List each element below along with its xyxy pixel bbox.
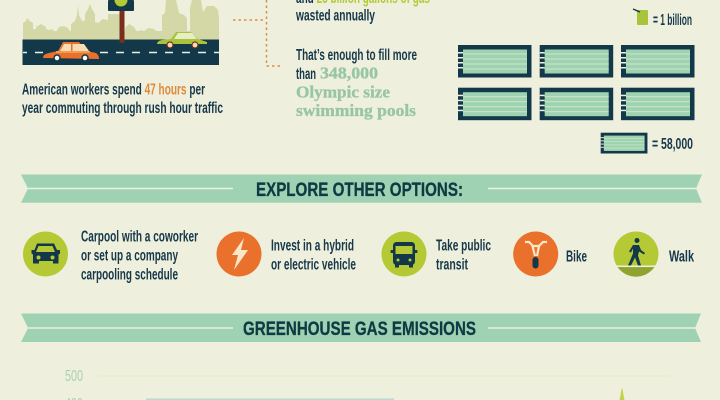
banner: explore other options [21,174,702,203]
banner: greenhouse gas emissions [21,314,701,342]
text: carpool: Carpool with a coworker [81,228,198,246]
gridline [98,376,670,377]
green spike [620,387,624,400]
option: hybrid or electric [216,232,356,276]
text: transit [436,238,491,274]
icon: gas can [633,9,648,25]
option: carpool [23,228,198,284]
icon: lightning bolt [216,232,262,276]
option: walk [614,232,694,277]
text: carpool: carpooling schedule [81,266,178,284]
text: walk: Walk [669,248,694,266]
text: swimming pools comparison: Olympic size [296,82,390,102]
icon: bus [382,232,426,276]
orange car [43,42,99,61]
panel: commute illustration [22,0,219,65]
text: carpool: or set up a company [81,248,178,264]
text: gallons of gas wasted: wasted annually [295,8,375,24]
icon: walking person [614,232,658,277]
dotted connector [233,0,282,66]
option: public transit [382,232,491,276]
green car [157,32,207,48]
bar top [146,398,394,400]
text: swimming pools comparison [296,47,417,120]
text: transit: transit [436,256,468,274]
text: swimming pools comparison: That’s enough to fill more [296,47,417,64]
text: hybrid: Invest in a hybrid [271,238,354,254]
banner: explore other options: EXPLORE OTHER OPTIONS: [256,179,463,201]
text: gallons of gas wasted [295,0,430,24]
banner: greenhouse gas emissions: GREENHOUSE GAS EMISSIONS [243,319,476,340]
legend icon: pool [601,133,647,154]
road [22,40,219,65]
traffic signal [108,0,134,43]
text: swimming pools comparison: than [296,66,316,83]
text: bike: Bike [566,248,587,266]
road lane dashes [23,52,219,54]
text: carpool [81,228,198,284]
text: hybrid [271,238,356,274]
pictogram: six swimming pools [458,45,694,120]
text: transit: Take public [436,238,491,254]
text: swimming pools comparison: 348,000 [320,64,378,82]
text: commuting hours: American workers spend 47 hours per [22,82,205,98]
icon: bicycle [513,232,558,276]
city skyline [23,0,219,40]
chart: greenhouse gas emissions [65,368,670,400]
option: bike [513,232,587,276]
axis label: 500: 500 [65,368,83,385]
text: commuting through rush hour: year commuting through rush hour traffic [22,100,223,117]
text: hybrid: or electric vehicle [271,256,356,274]
icon: car [23,232,68,276]
text: swimming pools comparison: swimming pools [296,101,416,120]
legend: 58,000: = 58,000 [652,136,693,153]
